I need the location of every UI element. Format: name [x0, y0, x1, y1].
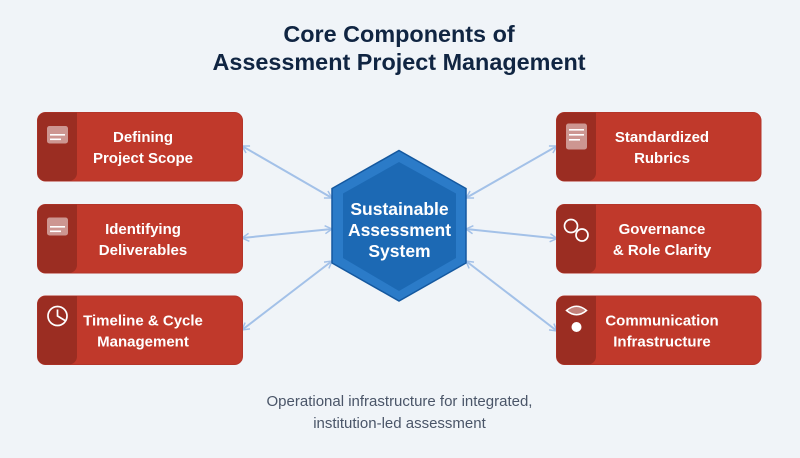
card: Identifying Deliverables: [38, 204, 242, 273]
icon: rubric sheet: [566, 124, 587, 150]
card: Governance & Role Clarity: & Role Clarity: [613, 242, 712, 259]
card: Governance & Role Clarity: [556, 204, 761, 273]
icon: signal: [566, 306, 586, 332]
card: Communication Infrastructure: Communication: [605, 312, 719, 330]
title: Core Components of: [283, 21, 515, 47]
central hexagon: System: [368, 241, 431, 261]
card: Standardized Rubrics: [556, 112, 761, 181]
card: Governance & Role Clarity: Governance: [619, 221, 705, 238]
card: Communication Infrastructure: [556, 296, 761, 364]
card: Defining Project Scope: [38, 112, 242, 181]
card: Timeline & Cycle Management: Timeline & Cycle: [83, 312, 203, 330]
central hexagon: Assessment: [348, 220, 451, 240]
card: Identifying Deliverables: Deliverables: [99, 242, 187, 259]
card: Timeline & Cycle Management: [38, 296, 242, 364]
card: Timeline & Cycle Management: Management: [97, 334, 189, 350]
caption: institution-led assessment: [313, 415, 487, 432]
icon: linked circles: [564, 220, 588, 241]
card: Communication Infrastructure: Infrastructure: [613, 334, 711, 350]
card: Standardized Rubrics: Rubrics: [634, 150, 690, 167]
icon: document: [47, 218, 68, 236]
card: Standardized Rubrics: Standardized: [615, 129, 709, 146]
card: Defining Project Scope: Defining: [113, 129, 173, 146]
connector arrows: [242, 146, 557, 331]
caption: [267, 393, 532, 432]
title: Assessment Project Management: [212, 49, 586, 75]
card: Defining Project Scope: Project Scope: [93, 150, 193, 167]
title: [212, 21, 586, 75]
icon: clock: [48, 306, 67, 326]
card: Identifying Deliverables: Identifying: [105, 221, 181, 238]
icon: document: [47, 126, 68, 144]
caption: Operational infrastructure for integrated,: [267, 393, 532, 410]
central hexagon: Sustainable: [350, 199, 449, 219]
central hexagon: [332, 150, 466, 301]
